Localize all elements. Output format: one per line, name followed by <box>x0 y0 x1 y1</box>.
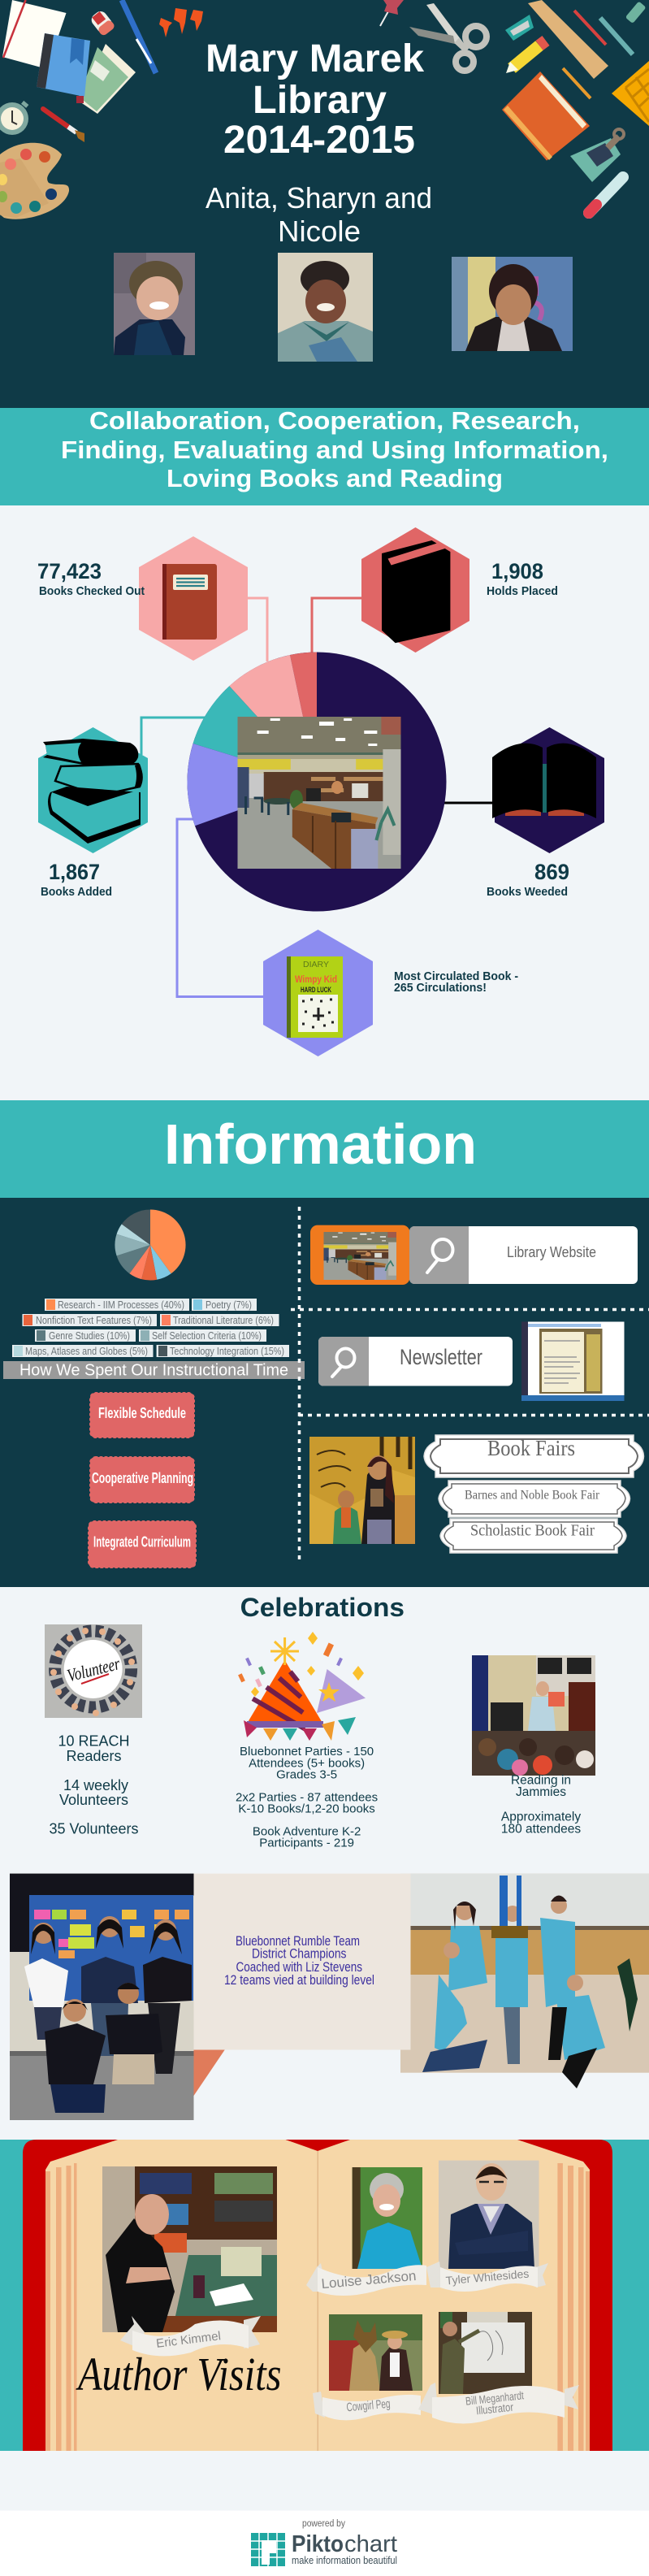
rumble team text panel <box>193 1874 411 2049</box>
photo: rumble team right <box>400 1874 649 2088</box>
text: parties: 2x2 Parties - 87 attendees <box>236 1791 378 1805</box>
icon: Diary of a Wimpy Kid cover: DIARY <box>303 961 329 969</box>
chart legend: Research - IIM Processes (40%) <box>58 1299 184 1311</box>
photo: Eric Kimmel <box>102 2166 277 2332</box>
icon: scraper <box>570 129 624 182</box>
stat: books weeded: Books Weeded <box>487 885 568 899</box>
icon: sharpener <box>505 15 534 41</box>
text: parties: Attendees (5+ books) <box>249 1757 365 1771</box>
logo: Piktochart wordmark: chart <box>344 2531 397 2557</box>
text: parties: K-10 Books/1,2-20 books <box>238 1802 375 1816</box>
icon: party hats <box>238 1632 366 1741</box>
chart legend: Genre Studies (10%) <box>49 1329 130 1342</box>
stat: holds placed: Holds Placed <box>487 584 558 598</box>
stat: holds placed: 1,908 <box>491 559 543 583</box>
pie chart: instructional time <box>115 1209 186 1280</box>
text: jammies: 180 attendees <box>501 1822 581 1836</box>
photo: rumble team left <box>10 1874 193 2120</box>
heading band: Information <box>0 1100 649 1198</box>
photo: Sharyn <box>278 253 373 362</box>
icon: palette <box>0 143 69 219</box>
pie chart: library stats <box>187 652 447 912</box>
photo: library interior <box>237 717 401 869</box>
plaque: Scholastic Book Fair: Scholastic Book Fair <box>470 1522 595 1540</box>
heading band: Information: Information <box>164 1112 477 1176</box>
icon: scissors <box>409 3 487 71</box>
stat: books weeded <box>487 860 569 899</box>
text: parties <box>236 1745 378 1850</box>
subtitle <box>206 181 432 248</box>
text: parties: Bluebonnet Parties - 150 <box>240 1745 374 1759</box>
chart legend <box>12 1299 289 1357</box>
accent triangle <box>193 2049 225 2096</box>
text: jammies: Reading in <box>511 1773 571 1788</box>
photo: Anita <box>114 253 195 355</box>
icon: brown book <box>162 564 217 640</box>
rumble team text panel: District Champions <box>252 1946 346 1962</box>
chart legend: Traditional Literature (6%) <box>173 1314 274 1326</box>
button: Newsletter: Newsletter <box>400 1345 482 1369</box>
text: volunteers: Readers <box>66 1748 122 1764</box>
icon: red pin <box>380 0 404 26</box>
chart legend: Nonfiction Text Features (7%) <box>36 1314 152 1326</box>
text: parties: Book Adventure K-2 <box>253 1824 361 1838</box>
logo: Piktochart wordmark: make information beautiful <box>292 2555 397 2566</box>
plaque: Barnes and Noble Book Fair <box>439 1481 630 1517</box>
text: parties: Participants - 219 <box>259 1837 354 1850</box>
chart legend: Self Selection Criteria (10%) <box>152 1329 262 1342</box>
photo: Louise Jackson <box>353 2167 422 2269</box>
icon: blue book <box>37 33 90 103</box>
stat: books checked out: 77,423 <box>37 559 102 583</box>
author visits panel <box>0 2140 649 2451</box>
badge: Integrated Curriculum <box>89 1521 196 1568</box>
information panel <box>0 1198 649 1587</box>
badge: Cooperative Planning: Cooperative Planning <box>92 1470 193 1486</box>
plaque: Book Fairs: Book Fairs <box>487 1436 575 1460</box>
heading: Author Visits: Author Visits <box>76 2348 282 2400</box>
ribbon: Bill Meganhardt <box>418 2383 579 2423</box>
icon: clock <box>0 101 28 135</box>
stat: most circulated book <box>394 970 518 995</box>
badge: Flexible Schedule: Flexible Schedule <box>98 1405 186 1421</box>
icon: blue pen <box>122 0 156 73</box>
icon: Diary of a Wimpy Kid cover: HARD LUCK <box>301 986 331 994</box>
badge: Integrated Curriculum: Integrated Curriculum <box>93 1534 191 1550</box>
icon: stack of books <box>43 739 142 843</box>
icon: Diary of a Wimpy Kid cover: Wimpy Kid <box>295 974 337 985</box>
icon: ruler <box>528 0 608 79</box>
ribbon: Tyler Whitesides <box>426 2262 548 2292</box>
icon: eraser <box>89 9 115 37</box>
dividers <box>291 1207 649 1560</box>
button: Newsletter <box>318 1337 513 1386</box>
badge: Flexible Schedule <box>90 1393 194 1438</box>
footer: powered by <box>302 2519 345 2529</box>
subtitle: Anita, Sharyn and <box>206 181 432 215</box>
hexagon: holds placed <box>361 527 469 653</box>
icon: green book <box>79 44 136 114</box>
image: volunteer circle: Volunteer <box>65 1653 122 1685</box>
title: Mary Marek <box>206 37 424 80</box>
hexagon: books checked out <box>139 536 248 661</box>
stat: most circulated book: 265 Circulations! <box>394 982 487 995</box>
chart title bar: How We Spent Our Instructional Time <box>19 1362 288 1380</box>
ribbon: Bill Meganhardt: Illustrator <box>475 2400 514 2417</box>
icon: paint brush <box>43 109 84 142</box>
open book <box>23 2140 612 2451</box>
teal slogan band: Loving Books and Reading <box>167 464 503 492</box>
photo: Cowgirl Peg <box>329 2314 422 2391</box>
newsletter screenshot <box>521 1321 624 1401</box>
ribbon: Eric Kimmel: Eric Kimmel <box>155 2329 222 2351</box>
chart legend: Poetry (7%) <box>206 1299 252 1311</box>
stat: holds placed <box>487 559 558 598</box>
photo: Nicole <box>452 257 573 351</box>
photo: book fair <box>309 1437 415 1544</box>
footer <box>0 2511 649 2576</box>
rumble team text panel: Coached with Liz Stevens <box>236 1959 362 1975</box>
ribbon: Tyler Whitesides: Tyler Whitesides <box>445 2267 530 2287</box>
icon: black book <box>382 540 450 643</box>
header panel <box>0 0 649 409</box>
plaque: Barnes and Noble Book Fair: Barnes and Noble Book Fair <box>465 1489 600 1503</box>
icon: test tube <box>589 177 623 213</box>
title: 2014-2015 <box>223 119 415 162</box>
icon: push pins <box>159 8 203 37</box>
plaque: Scholastic Book Fair <box>440 1519 626 1553</box>
heading: Celebrations: Celebrations <box>240 1593 405 1622</box>
button: Library Website <box>409 1226 638 1284</box>
connector lines <box>141 598 495 996</box>
logo: Piktochart mark <box>251 2533 285 2566</box>
text: volunteers: 14 weekly <box>63 1777 128 1793</box>
hexagon: most circulated book <box>263 930 373 1056</box>
rumble team text panel: 12 teams vied at building level <box>224 1972 374 1988</box>
button: Library Website: Library Website <box>507 1244 596 1260</box>
icon: calculator <box>612 61 649 126</box>
chart legend: Maps, Atlases and Globes (5%) <box>25 1345 148 1357</box>
title <box>206 37 424 162</box>
badge: Cooperative Planning <box>90 1457 194 1503</box>
teal slogan band: Finding, Evaluating and Using Information, <box>61 436 608 464</box>
text: volunteers <box>49 1733 139 1837</box>
stat: books checked out: Books Checked Out <box>39 584 145 598</box>
text: volunteers: Volunteers <box>59 1792 128 1808</box>
image: volunteer circle <box>45 1624 142 1718</box>
text: jammies <box>501 1773 581 1836</box>
hexagon: books added <box>38 727 148 853</box>
icon: orange book <box>502 72 590 161</box>
title: Library <box>253 79 387 122</box>
photo: Bill Meganhardt <box>439 2312 532 2394</box>
stat: most circulated book: Most Circulated Book - <box>394 970 518 983</box>
stat: books added: Books Added <box>41 885 112 899</box>
icon: Diary of a Wimpy Kid cover <box>287 956 343 1038</box>
ribbon: Bill Meganhardt: Bill Meganhardt <box>465 2388 525 2408</box>
logo: Piktochart wordmark <box>292 2531 397 2566</box>
stat: books weeded: 869 <box>534 860 569 884</box>
chart legend: Technology Integration (15%) <box>170 1345 284 1357</box>
teal slogan band: Collaboration, Cooperation, Research, <box>89 406 580 435</box>
icon: open black book <box>492 744 596 818</box>
stat: books added: 1,867 <box>49 860 100 884</box>
text: parties: Grades 3-5 <box>276 1768 337 1781</box>
text: jammies: Approximately <box>501 1811 581 1824</box>
library website thumbnail <box>310 1225 409 1285</box>
text: volunteers: 35 Volunteers <box>49 1821 139 1837</box>
icon: white notebook <box>2 0 67 69</box>
text: volunteers: 10 REACH <box>58 1733 130 1750</box>
ribbon: Cowgirl Peg: Cowgirl Peg <box>346 2397 391 2414</box>
stat: books checked out <box>37 559 145 598</box>
teal slogan band <box>0 406 649 505</box>
icon: pencils and pens <box>506 1 647 98</box>
rumble team text panel: Bluebonnet Rumble Team <box>236 1933 360 1949</box>
subtitle: Nicole <box>278 215 361 248</box>
logo: Piktochart wordmark: Pikto <box>292 2531 344 2557</box>
ribbon: Louise Jackson <box>306 2263 426 2296</box>
plaque: Book Fairs <box>424 1435 643 1477</box>
photo: Reading in Jammies <box>472 1655 595 1776</box>
hexagon: books weeded <box>492 727 604 853</box>
photo: Tyler Whitesides <box>439 2161 539 2269</box>
ribbon: Louise Jackson: Louise Jackson <box>321 2268 417 2292</box>
text: jammies: Jammies <box>516 1785 566 1799</box>
ribbon: Cowgirl Peg <box>313 2392 421 2420</box>
stat: books added <box>41 860 112 899</box>
ribbon: Eric Kimmel <box>120 2316 261 2356</box>
